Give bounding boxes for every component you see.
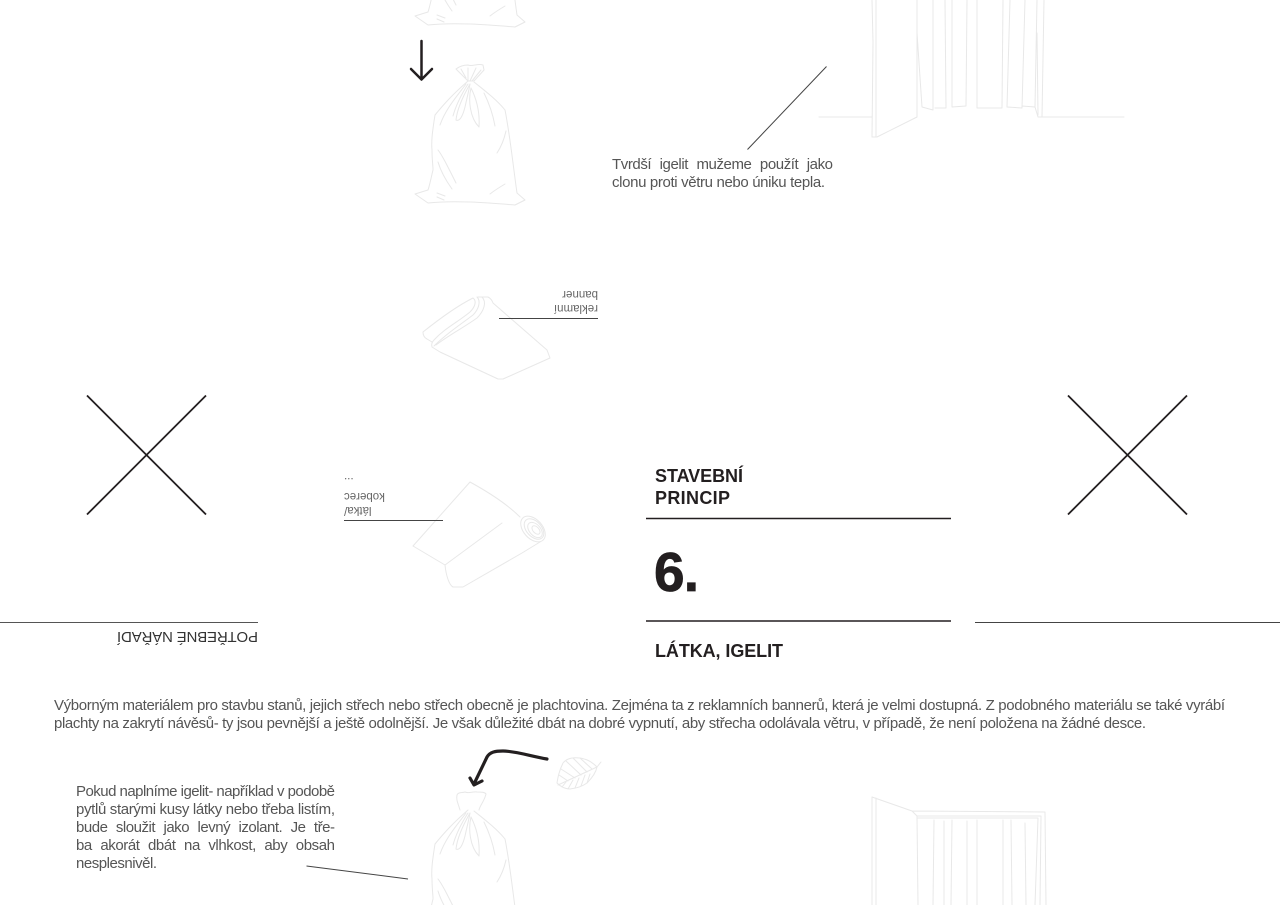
label: latka koberec (rotated): látka/ [343, 504, 372, 516]
label: latka koberec (rotated) [343, 475, 443, 520]
text: pokud naplnime igelit: pytlů starými kusy látky nebo třeba listím, [76, 801, 335, 818]
heading: potrebne naradi (rotated): POTŘEBNÉ NÁŘADÍ [116, 628, 258, 645]
heading: stavebni princip: PRINCIP [655, 488, 730, 508]
icon: cross right [1068, 396, 1187, 514]
heading: stavebni princip: STAVEBNÍ [655, 465, 744, 486]
main paragraph: plachty na zakrytí návěsů- ty jsou pevnější a ještě odolnější. Je však důležité dbát na dobré vypnutí, aby střecha odolávala větru, v případě, že není položena na žádné desce. [54, 715, 1146, 732]
subtitle: LÁTKA, IGELIT [655, 640, 783, 661]
text: tvrdsi igelit: Tvrdší igelit mužeme použít jako [612, 156, 833, 173]
title block [646, 465, 951, 661]
curved arrow [470, 751, 547, 785]
label: reklamni banner (rotated): reklamní [553, 302, 598, 314]
sack top (cropped) [415, 0, 525, 27]
tent doorway drawing top [819, 0, 1124, 137]
heading: stavebni princip [655, 465, 744, 508]
main paragraph [54, 697, 1226, 732]
label: latka koberec (rotated): koberec [344, 490, 385, 502]
main paragraph: Výborným materiálem pro stavbu stanů, jejich střech nebo střech obecně je plachtovina. Zejména ta z reklamních bannerů, která je velmi dostupná. Z podobného materiálu se také vyrábí [54, 697, 1226, 714]
label: reklamni banner (rotated): banner [562, 288, 598, 300]
icon: leaf [557, 758, 601, 789]
label: latka koberec (rotated): ... [344, 475, 354, 487]
icon: cross left [87, 396, 206, 514]
tent doorway drawing bottom [872, 797, 1046, 905]
fabric folded banner [423, 297, 550, 379]
text: pokud naplnime igelit: ba akorát dbát na vlhkost, aby obsah [76, 837, 335, 854]
text: tvrdsi igelit: clonu proti větru nebo úniku tepla. [612, 174, 825, 191]
number: 6. [654, 541, 699, 603]
leader line to top text [748, 66, 826, 150]
sack bottom (cropped) [415, 792, 525, 905]
label: reklamni banner (rotated) [499, 288, 598, 318]
text: pokud naplnime igelit: nesplesnivěl. [76, 855, 157, 872]
right rule [975, 622, 1280, 624]
fabric roll [413, 482, 550, 587]
text: pokud naplnime igelit: Pokud naplníme igelit- například v podobě [76, 783, 335, 800]
arrow down [411, 41, 432, 80]
sack tied [415, 64, 525, 205]
text: pokud naplnime igelit: bude sloužit jako levný izolant. Je tře- [76, 819, 335, 836]
text: pokud naplnime igelit [76, 783, 335, 872]
leader line to bottom sack [306, 866, 408, 879]
text: tvrdsi igelit [612, 156, 833, 191]
